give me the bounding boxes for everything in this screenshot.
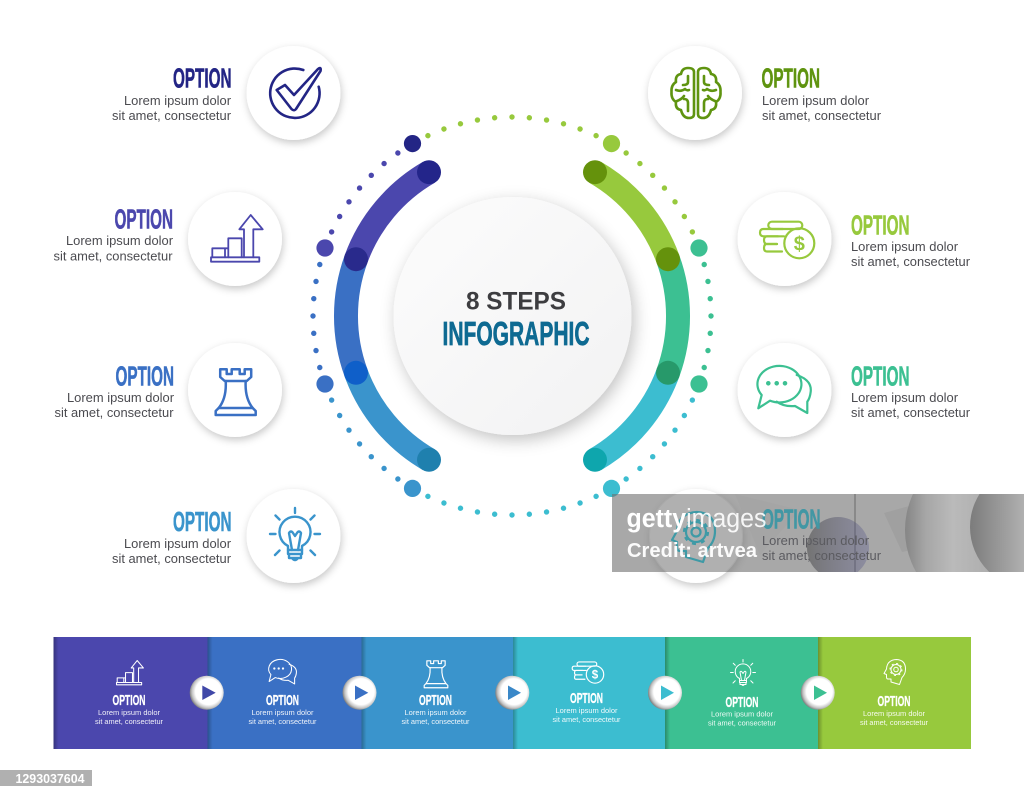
step 1 panel: OPTION <box>112 692 146 709</box>
option 1: check: sit amet, consectetur <box>112 108 232 123</box>
option 8: brain <box>648 46 882 140</box>
option 7: coins: sit amet, consectetur <box>851 254 971 269</box>
option 7: coins: Lorem ipsum dolor <box>851 239 959 254</box>
option 6: chat: sit amet, consectetur <box>851 405 971 420</box>
arrow button 1 <box>190 676 224 710</box>
step 5 panel: OPTION <box>726 694 758 711</box>
step 6 panel: sit amet, consectetur <box>860 718 928 727</box>
step 4 panel: Lorem ipsum dolor <box>556 706 618 715</box>
option 1: check: OPTION <box>173 62 232 94</box>
icon: growth chart <box>211 215 263 262</box>
option 5: head with gear: sit amet, consectetur <box>762 548 882 563</box>
icon: coins <box>572 662 604 683</box>
title: infographic: INFOGRAPHIC <box>442 316 590 353</box>
step 3 panel: Lorem ipsum dolor <box>404 708 467 717</box>
option 2: chart: OPTION <box>114 204 173 234</box>
icon: chess rook <box>424 661 448 688</box>
icon: chess rook <box>216 369 256 415</box>
option 2: chart: Lorem ipsum dolor <box>66 233 174 248</box>
icon: head with gear <box>672 512 715 562</box>
icon: growth chart <box>117 661 143 685</box>
step 6 panel <box>818 637 971 749</box>
option 4: bulb <box>112 489 340 583</box>
watermark: credit: Credit: artvea <box>627 540 758 562</box>
image id tag: 1293037604 <box>16 772 85 786</box>
option 5: head with gear: OPTION <box>762 504 820 534</box>
step 3 panel <box>362 637 514 749</box>
icon: brain <box>671 68 721 118</box>
option 7: coins <box>738 192 971 286</box>
option 6: chat: Lorem ipsum dolor <box>851 390 959 405</box>
option 6: chat: OPTION <box>851 360 910 392</box>
step 6 panel: Lorem ipsum dolor <box>863 709 926 718</box>
step 2 panel: Lorem ipsum dolor <box>252 708 314 717</box>
step 2 panel: sit amet, consectetur <box>248 717 317 726</box>
arrow button 3 <box>495 676 529 710</box>
step 4 panel: OPTION <box>570 690 603 707</box>
step 1 panel: sit amet, consectetur <box>95 717 163 726</box>
icon: head with gear <box>884 660 906 684</box>
title: 8 steps: 8 STEPS <box>466 288 566 316</box>
option 5: head with gear: Lorem ipsum dolor <box>762 533 870 548</box>
step 2 panel: OPTION <box>266 692 299 709</box>
arrow button 5 <box>801 676 835 710</box>
option 3: rook: Lorem ipsum dolor <box>67 390 175 405</box>
option 3: rook: sit amet, consectetur <box>54 405 174 420</box>
icon: coins <box>760 222 814 258</box>
step 1 panel: Lorem ipsum dolor <box>98 708 161 717</box>
option 8: brain: sit amet, consectetur <box>762 108 882 123</box>
step 5 panel <box>665 637 818 749</box>
option 3: rook: OPTION <box>116 360 174 392</box>
step 4 panel: sit amet, consectetur <box>552 715 621 724</box>
arrow button 2 <box>342 676 376 710</box>
option 5 circle <box>649 489 743 583</box>
option 3: rook <box>54 343 282 437</box>
icon: light bulb <box>730 660 756 686</box>
icon: speech bubbles <box>269 659 296 684</box>
option 6: chat <box>738 343 971 437</box>
watermark: getty images: gettyimages <box>626 505 766 533</box>
step 5 panel: Lorem ipsum dolor <box>711 710 774 719</box>
segmented arc ring <box>344 160 680 472</box>
step 4 panel <box>513 637 666 749</box>
option 1: check: Lorem ipsum dolor <box>124 93 232 108</box>
step 2 panel <box>208 637 362 749</box>
watermark banner background <box>612 494 1024 572</box>
step 1 panel <box>54 637 208 749</box>
image id tag <box>0 770 92 786</box>
icon: speech bubbles <box>757 366 811 413</box>
option 4: bulb: OPTION <box>173 506 232 537</box>
icon: check mark <box>270 68 321 118</box>
option 2: chart: sit amet, consectetur <box>54 248 173 264</box>
watermark text <box>626 505 766 562</box>
option 8: brain: Lorem ipsum dolor <box>762 93 870 108</box>
step 3 panel: sit amet, consectetur <box>402 717 470 726</box>
option 2: chart <box>54 192 282 286</box>
center circle with title <box>394 197 632 435</box>
option 1: check <box>112 46 340 140</box>
step 5 panel: sit amet, consectetur <box>708 719 776 728</box>
dotted ring <box>310 114 714 518</box>
option 8: brain: OPTION <box>762 62 820 94</box>
step 6 panel: OPTION <box>878 693 910 710</box>
icon: light bulb <box>270 508 320 560</box>
option 7: coins: OPTION <box>851 210 910 240</box>
bottom step strip <box>54 637 971 749</box>
arrow button 4 <box>648 676 682 710</box>
option 5: head with gear <box>672 504 882 563</box>
option 4: bulb: sit amet, consectetur <box>112 551 232 566</box>
step 3 panel: OPTION <box>419 692 452 709</box>
option 4: bulb: Lorem ipsum dolor <box>124 536 232 551</box>
